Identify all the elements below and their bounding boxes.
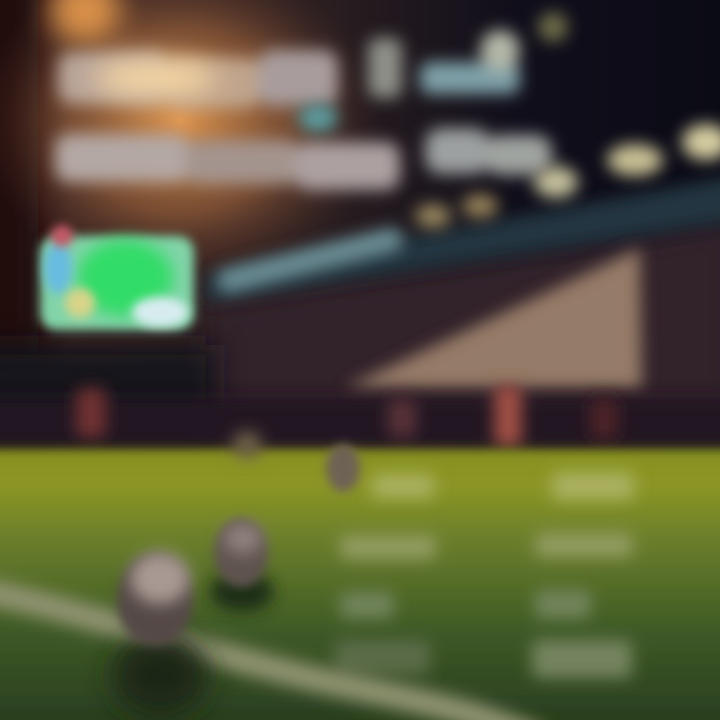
background sky	[0, 0, 720, 460]
ball shadow near	[112, 633, 208, 717]
curved pitch line	[0, 588, 540, 720]
small ball far	[232, 431, 262, 459]
top right light	[538, 12, 568, 42]
scoreboard red corner	[51, 225, 73, 247]
title: blurred first line	[58, 30, 520, 108]
scoreboard white patch	[132, 297, 188, 327]
pitch	[0, 449, 720, 720]
top light flare	[49, 0, 121, 44]
dark base of stand	[0, 398, 720, 448]
ball second	[214, 519, 268, 587]
table column one	[335, 474, 436, 674]
orange floodlight glow	[0, 0, 380, 290]
title highlight	[93, 60, 217, 96]
table column two	[532, 472, 634, 678]
scoreboard green centre	[77, 240, 173, 316]
bridge truss	[205, 175, 720, 302]
stand below bridge	[205, 215, 720, 450]
ball shadow second	[210, 572, 274, 612]
figures in stand	[76, 385, 618, 447]
bridge lights	[215, 124, 720, 295]
ball second highlight	[223, 522, 263, 554]
scoreboard yellow patch	[65, 288, 95, 318]
title: blurred second line	[55, 128, 552, 190]
ball near	[117, 554, 193, 646]
scoreboard blue left	[44, 242, 72, 294]
tan triangular chart	[345, 248, 642, 388]
ball near highlight	[130, 552, 190, 604]
left pillar	[0, 0, 38, 470]
teal title accent	[298, 104, 338, 132]
dark stand panel under scoreboard	[0, 345, 215, 455]
scoreboard screen	[40, 236, 194, 330]
scoreboard	[40, 225, 194, 330]
ball mid	[326, 444, 360, 492]
